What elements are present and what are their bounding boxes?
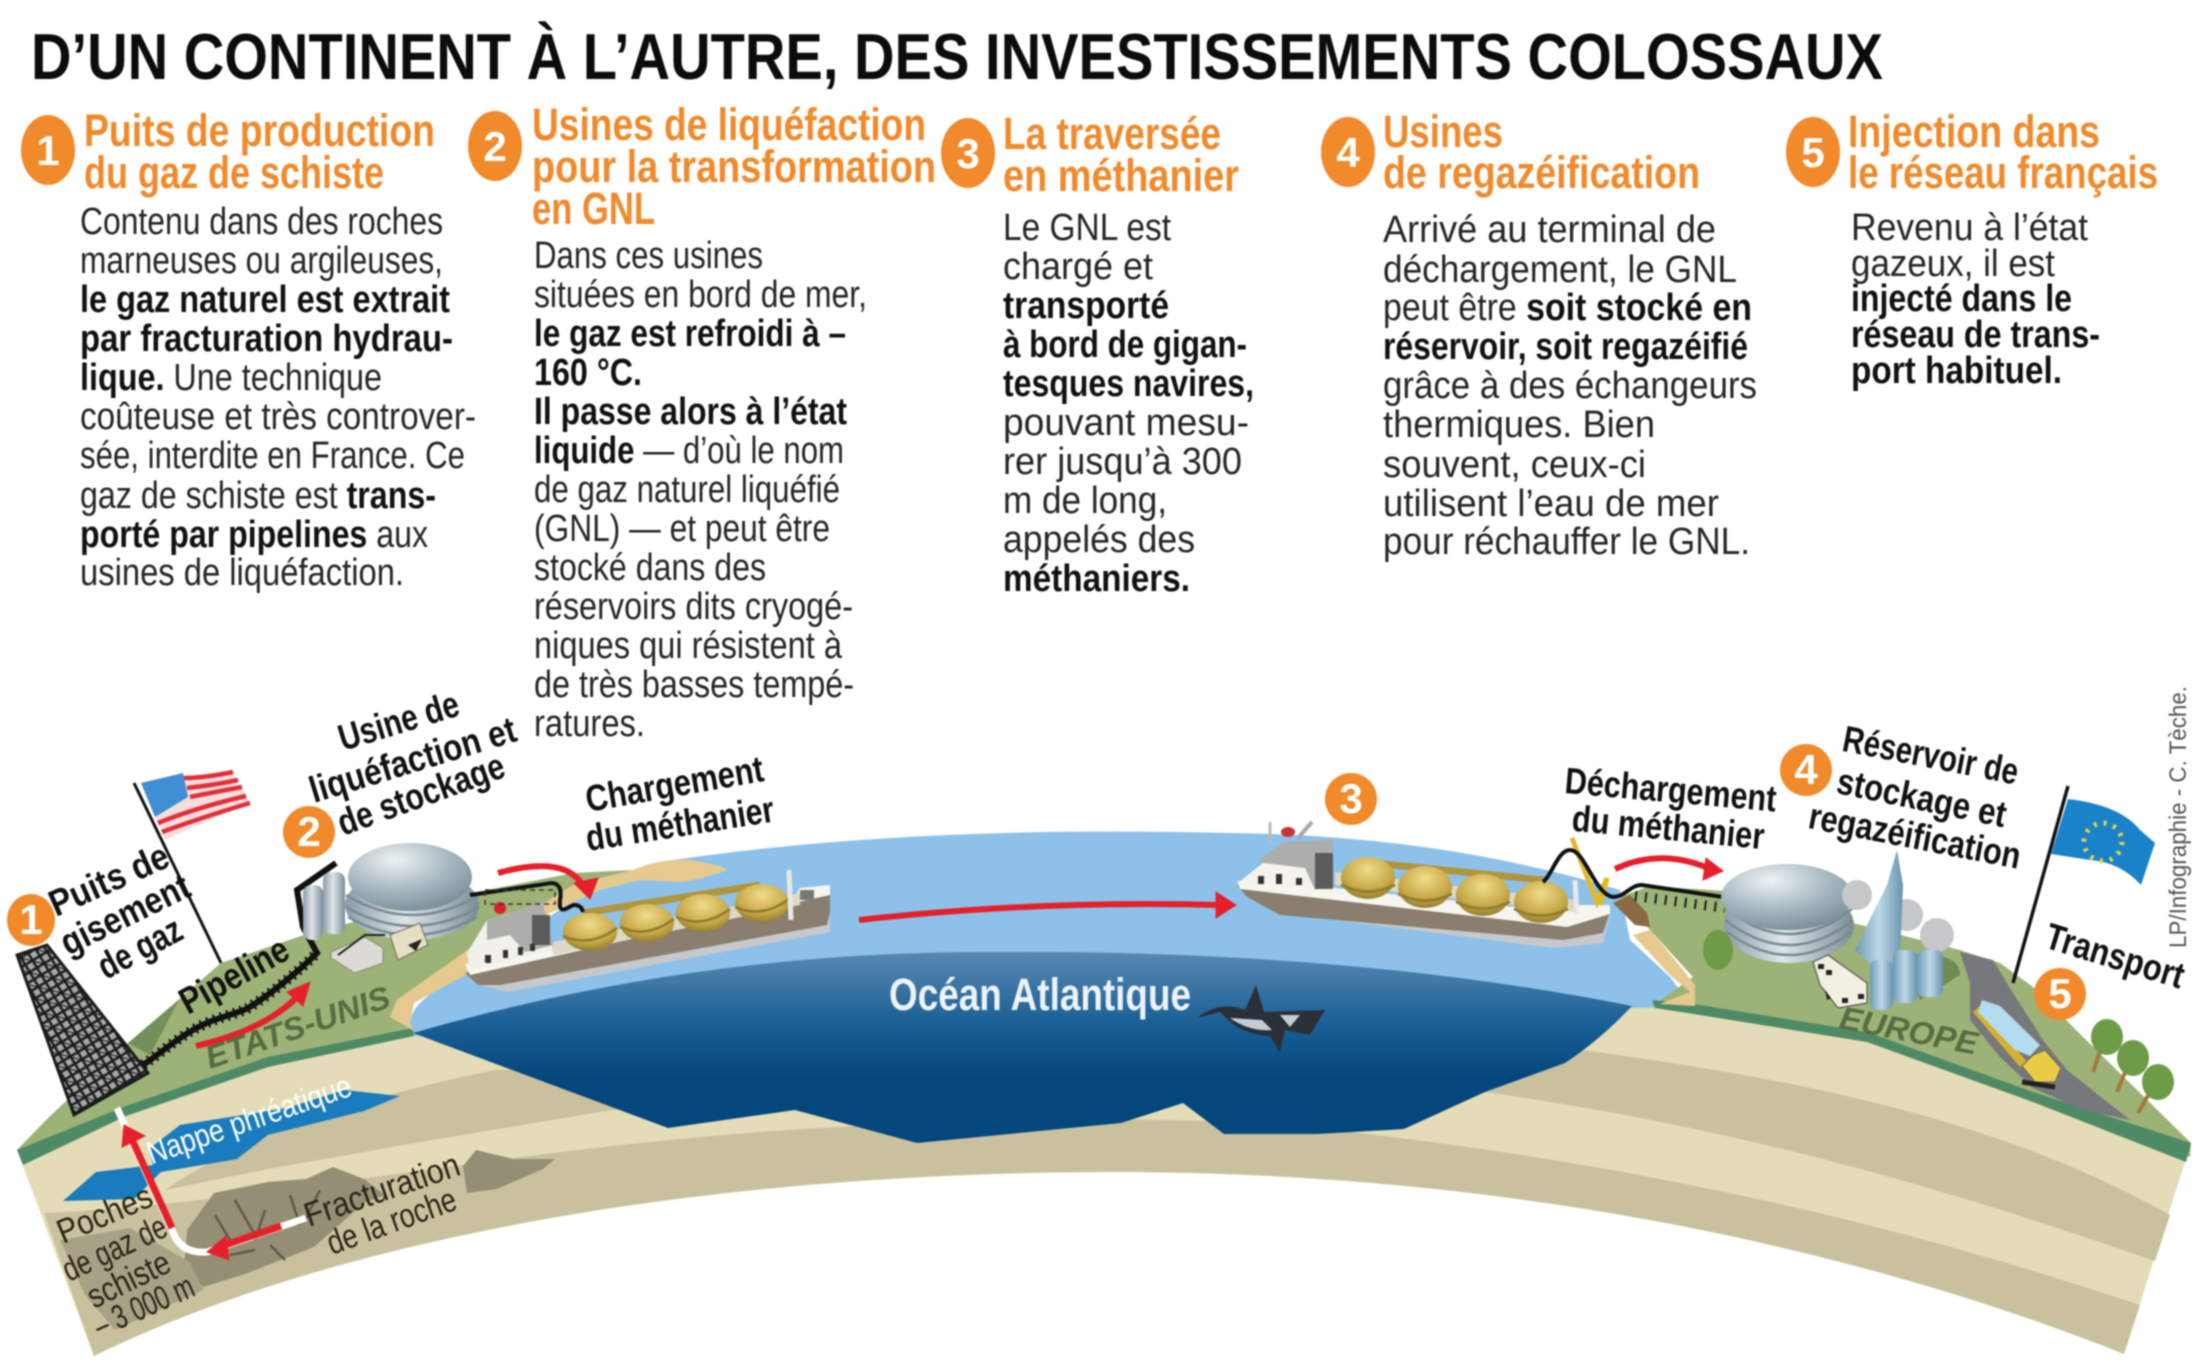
body step 3: rer jusqu’à 300: [1003, 441, 1242, 483]
body step 1: coûteuse et très controver-: [80, 396, 476, 438]
body step 4: [1383, 209, 1757, 563]
body step 5: port habituel.: [1851, 350, 2062, 392]
scene badge 4: 4: [1794, 746, 1818, 793]
heading step 4: [1383, 106, 1700, 198]
body step 2: niques qui résistent à: [534, 625, 843, 667]
scene badge 3: [1325, 773, 1377, 825]
heading step 3: en méthanier: [1003, 150, 1239, 201]
white drilling pipe: [117, 1108, 306, 1252]
scene badge 5: 5: [2048, 970, 2072, 1017]
land: United States: [17, 860, 727, 1165]
step 5 column: [1786, 106, 2158, 392]
arrow: gas rising: [122, 1125, 172, 1228]
label: water table: Nappe phréatique: [142, 1067, 356, 1171]
badge 2: [468, 111, 522, 181]
badge 4: 4: [1336, 129, 1360, 176]
body step 3: appelés des: [1003, 519, 1195, 561]
label: reservoir: Réservoir de: [1839, 718, 2022, 792]
badge 5: 5: [1801, 129, 1825, 176]
label: unloading: du méthanier: [1570, 798, 1766, 857]
scene badge 2: 2: [297, 808, 321, 855]
body step 3: pouvant mesu-: [1003, 402, 1249, 444]
road: [1960, 952, 2130, 1120]
label: plant: Usine de: [333, 683, 464, 759]
scene badge 5: [2034, 968, 2086, 1020]
badge 1: [21, 115, 75, 185]
label: shale pockets: – 3 000 m: [88, 1267, 200, 1345]
body step 5: [1851, 207, 2100, 392]
body step 1: par fracturation hydrau-: [80, 318, 453, 360]
body step 2: (GNL) — et peut être: [534, 508, 830, 550]
body step 2: de très basses tempé-: [534, 664, 854, 706]
label: shale pockets: schiste: [81, 1243, 177, 1316]
pipeline: [143, 863, 336, 1065]
body step 1: Contenu dans des roches: [80, 201, 443, 243]
label: reservoir: regazéification: [1805, 795, 2024, 877]
badge 5: [1786, 117, 1840, 187]
body step 3: m de long,: [1003, 480, 1167, 522]
label: unloading: Déchargement: [1563, 760, 1778, 819]
heading step 1: Puits de production: [84, 105, 435, 156]
heading step 3: [1003, 108, 1239, 201]
label: fracturing: [299, 1146, 465, 1263]
tanker truck: [1973, 1000, 2061, 1087]
heading step 2: Usines de liquéfaction: [532, 99, 926, 150]
body step 2: 160 °C.: [534, 352, 642, 394]
heading step 5: Injection dans: [1848, 106, 2100, 157]
label: loading: du méthanier: [583, 789, 777, 859]
body step 1: gaz de schiste est trans-: [80, 475, 436, 517]
step 2 column: [468, 99, 936, 745]
body step 3: Le GNL est: [1003, 207, 1171, 249]
step 3 column: [941, 108, 1254, 600]
trees: [2091, 1019, 2174, 1113]
body step 2: liquide — d’où le nom: [534, 430, 844, 472]
body step 1: sée, interdite en France. Ce: [80, 435, 465, 477]
arrow: ocean crossing: [859, 892, 1236, 920]
arrow: loading: [498, 866, 598, 899]
scene badge 3: 3: [1339, 775, 1363, 822]
scene badge 4: [1780, 744, 1832, 796]
label: plant: de stockage: [332, 745, 510, 844]
body step 1: lique. Une technique: [80, 357, 382, 399]
label: United States: ETATS-UNIS: [201, 979, 395, 1076]
rock layers: [17, 1000, 2191, 1356]
label: fracturing: Fracturation: [299, 1146, 465, 1235]
badge 3: 3: [956, 130, 980, 177]
body step 2: réservoirs dits cryogé-: [534, 586, 853, 628]
loading hose: [470, 883, 583, 912]
body step 4: souvent, ceux-ci: [1383, 444, 1646, 486]
label: loading: [582, 748, 777, 859]
label: shale pockets: [51, 1177, 200, 1345]
badge 1: 1: [36, 127, 60, 174]
refinery: [1842, 850, 1960, 1010]
label: reservoir: stockage et: [1833, 760, 2010, 835]
regasification tank: [1721, 864, 1854, 963]
body step 3: à bord de gigan-: [1003, 324, 1247, 366]
label: unloading: [1563, 760, 1778, 857]
unloading crane and hose: [1543, 838, 1730, 908]
body step 4: déchargement, le GNL: [1383, 249, 1737, 291]
title: D’UN CONTINENT À L’AUTRE, DES INVESTISSEMENTS COLOSSAUX: [31, 20, 1883, 93]
body step 2: Il passe alors à l’état: [534, 391, 847, 433]
liquefaction plant: [303, 843, 479, 973]
body step 1: porté par pipelines aux: [80, 514, 428, 556]
label: reservoir: [1805, 718, 2024, 877]
body step 3: transporté: [1003, 285, 1169, 327]
heading step 4: de regazéification: [1383, 147, 1700, 198]
body step 1: le gaz naturel est extrait: [80, 279, 450, 321]
ship 1: [465, 870, 830, 992]
scene badge 2: [283, 806, 335, 858]
land: Europe: [1613, 886, 2191, 1162]
scene badge 1: [7, 894, 55, 946]
arrow: unloading: [1615, 858, 1723, 880]
label: well: de gaz: [91, 909, 189, 987]
label: Europe: EUROPE: [1837, 1000, 1983, 1062]
credit: LP/Infographie - C. Tèche.: [2165, 686, 2192, 948]
body step 4: grâce à des échangeurs: [1383, 365, 1757, 407]
heading step 4: Usines: [1383, 106, 1503, 157]
tree by tank: [1703, 930, 1733, 970]
badge 3: [941, 118, 995, 188]
body step 4: thermiques. Bien: [1383, 404, 1655, 446]
arrow: pipeline flow: [196, 982, 310, 1046]
label: well: gisement: [54, 865, 196, 963]
ship 2: [1237, 822, 1610, 948]
badge 2: 2: [483, 123, 507, 170]
European flag: [2013, 786, 2155, 983]
body step 2: le gaz est refroidi à –: [534, 313, 846, 355]
heading step 2: pour la transformation: [532, 141, 936, 192]
body step 1: usines de liquéfaction.: [80, 552, 404, 594]
body step 4: utilisent l’eau de mer: [1383, 483, 1719, 525]
gas well tower: [17, 945, 148, 1115]
body step 2: de gaz naturel liquéfié: [534, 469, 840, 511]
cross-section illustration: [7, 683, 2191, 1356]
label: shale pockets: de gaz de: [56, 1208, 173, 1289]
body step 5: gazeux, il est: [1851, 243, 2055, 285]
body step 2: situées en bord de mer,: [534, 274, 867, 316]
body step 5: réseau de trans-: [1851, 314, 2100, 356]
shale gas pockets: [60, 1150, 555, 1330]
body step 1: [80, 201, 476, 594]
body step 4: peut être soit stocké en: [1383, 287, 1752, 329]
body step 2: stocké dans des: [534, 547, 766, 589]
heading step 2: en GNL: [532, 183, 655, 234]
orca: [1197, 985, 1325, 1053]
body step 3: méthaniers.: [1003, 558, 1190, 600]
label: well: [43, 835, 196, 987]
body step 3: tesques navires,: [1003, 363, 1254, 405]
heading step 2: [532, 99, 936, 234]
step 4 column: [1321, 106, 1757, 563]
body step 3: chargé et: [1003, 246, 1153, 288]
label: plant: liquéfaction et: [304, 709, 521, 811]
bus: [1813, 955, 1867, 1008]
label: plant: [304, 683, 521, 844]
label: ocean: Océan Atlantique: [889, 969, 1191, 1020]
water table: [63, 1090, 400, 1201]
arrow: fracturing: [207, 1226, 281, 1260]
heading step 1: du gaz de schiste: [84, 147, 384, 198]
deep ocean: [413, 952, 1632, 1143]
body step 3: [1003, 207, 1254, 600]
shallow ocean water: [410, 832, 1692, 1036]
body step 2: ratures.: [534, 703, 645, 745]
body step 4: réservoir, soit regazéifié: [1383, 326, 1748, 368]
label: well: Puits de: [43, 835, 175, 924]
body step 4: Arrivé au terminal de: [1383, 209, 1716, 251]
body step 5: Revenu à l’état: [1851, 207, 2088, 249]
body step 1: marneuses ou argileuses,: [80, 240, 443, 282]
label: fracturing: de la roche: [322, 1181, 462, 1263]
body step 5: injecté dans le: [1851, 278, 2072, 320]
heading step 5: [1848, 106, 2158, 198]
heading step 1: [84, 105, 435, 198]
body step 2: Dans ces usines: [534, 235, 763, 277]
badge 4: [1321, 117, 1375, 187]
step 1 column: [21, 105, 476, 594]
scene badge 1: 1: [19, 896, 43, 943]
heading step 3: La traversée: [1003, 108, 1221, 159]
label: shale pockets: Poches: [51, 1177, 158, 1251]
label: pipeline: Pipeline: [172, 928, 296, 1022]
label: loading: Chargement: [582, 748, 767, 820]
body step 2: [534, 235, 867, 745]
American flag: [134, 770, 250, 963]
body step 4: pour réchauffer le GNL.: [1383, 521, 1750, 563]
